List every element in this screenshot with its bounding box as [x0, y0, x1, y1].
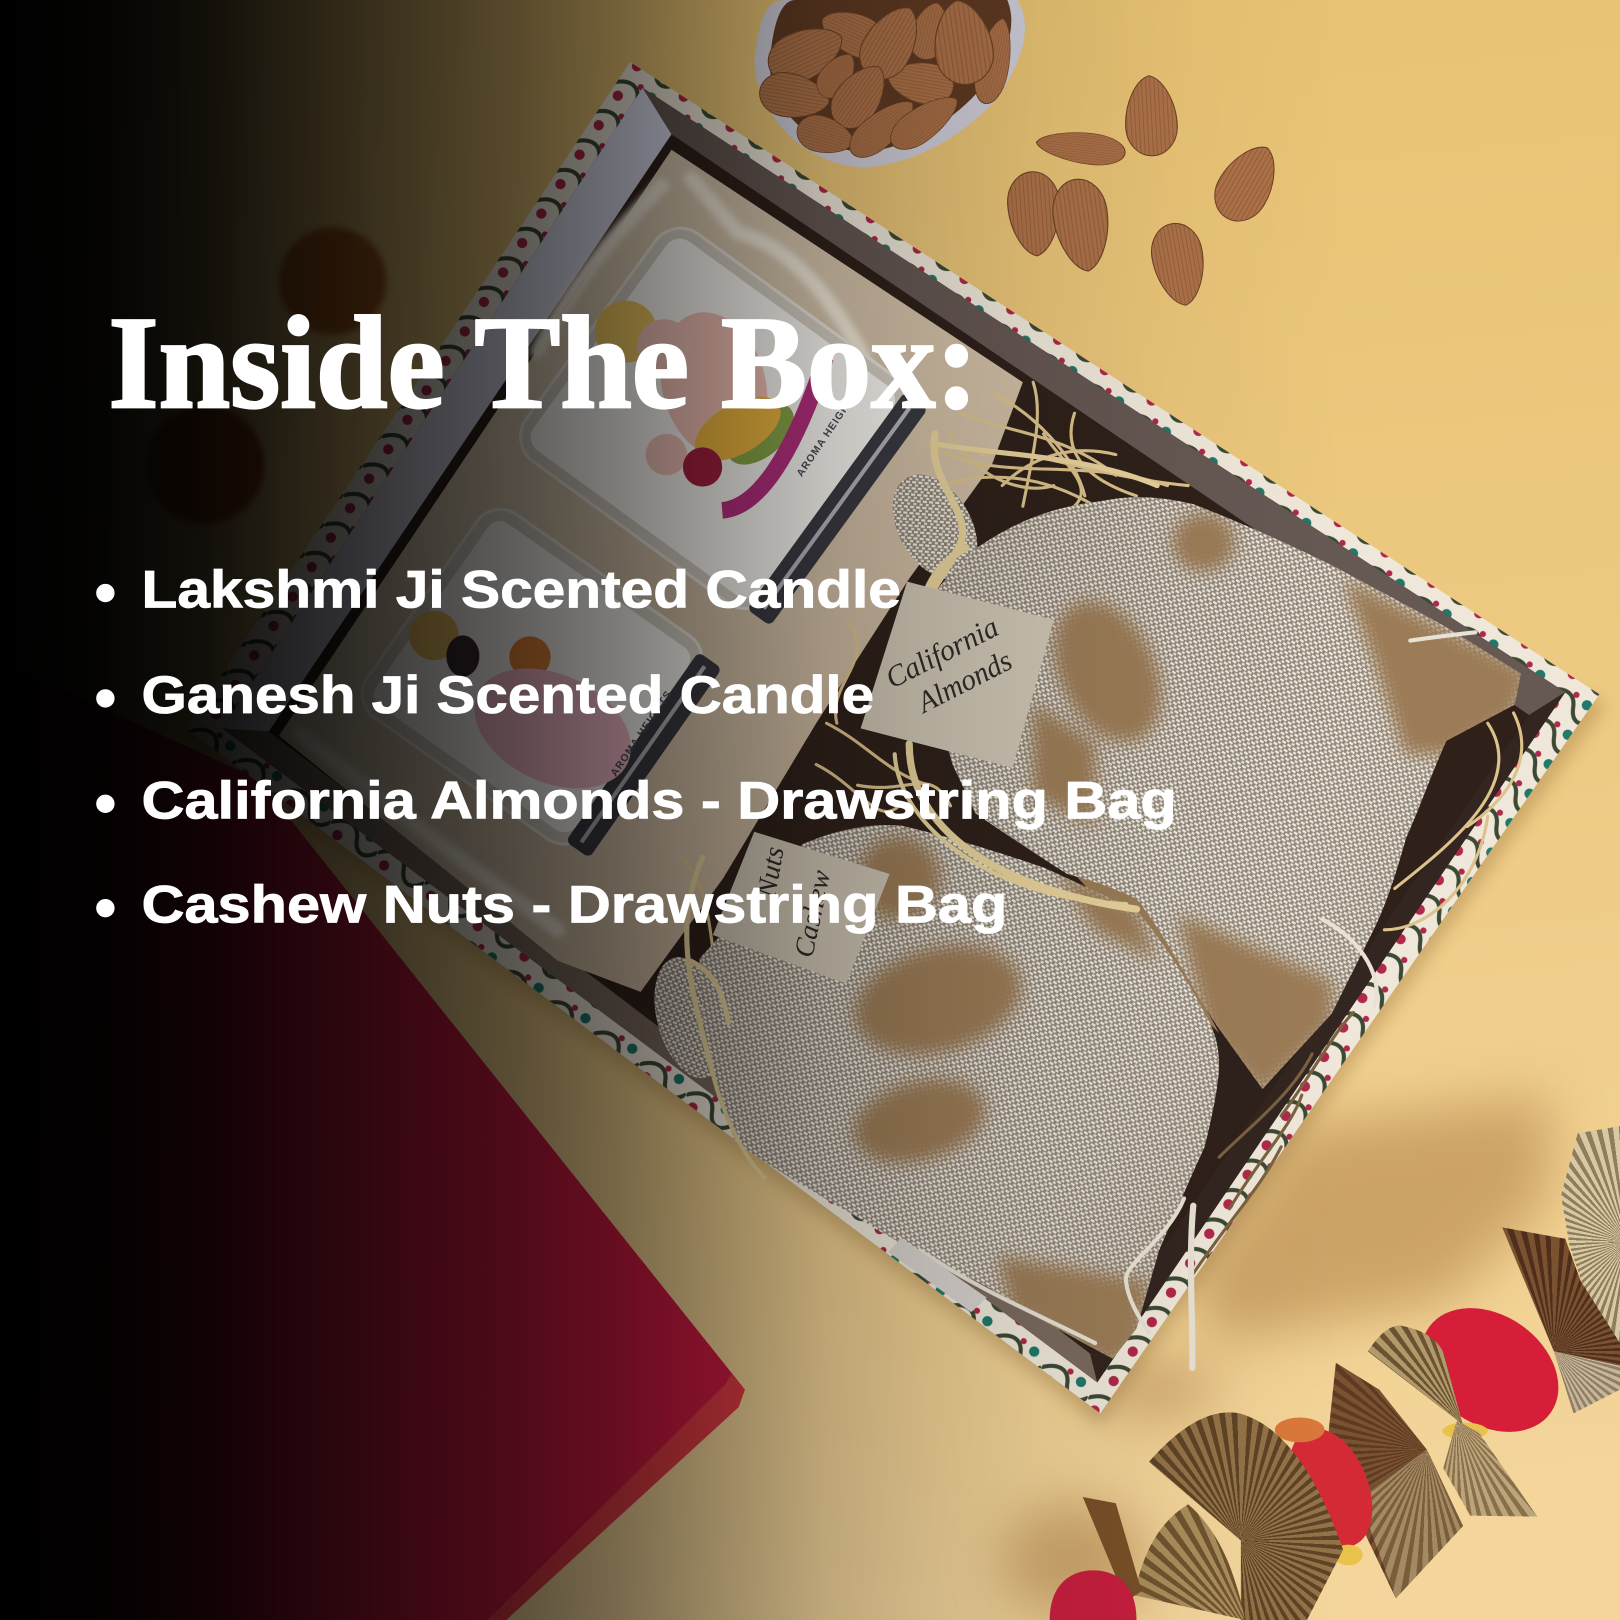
gold wedge fan	[1443, 1420, 1538, 1516]
silk cloth	[279, 150, 1023, 992]
white ribbon strings	[920, 632, 1475, 1368]
silk folds	[300, 179, 864, 930]
red pompom lower	[1050, 1570, 1136, 1620]
list item: Lakshmi Ji candle: Lakshmi Ji Scented Candle	[142, 560, 901, 619]
red pompom middle	[1273, 1416, 1388, 1565]
patterned rim	[186, 62, 1599, 1413]
almonds drawstring bag	[892, 474, 1521, 1089]
pale fan top right	[1561, 1126, 1620, 1343]
soft shadows on surface	[1002, 1095, 1550, 1617]
list item: Cashew Nuts: Cashew Nuts - Drawstring Bag	[142, 876, 1007, 935]
tan lower fan centre	[1370, 1450, 1463, 1598]
candle: Ganesh Ji	[508, 216, 932, 631]
candle: Ganesh Ji: AROMA HEIGHTS	[795, 389, 861, 479]
open gift box	[186, 62, 1608, 1426]
brown fan centre	[1328, 1363, 1463, 1598]
almond bowl	[754, 0, 1025, 167]
box shadow	[186, 124, 1608, 1426]
list item: California Almonds: California Almonds - Drawstring Bag	[142, 771, 1177, 830]
marigold flowers	[145, 227, 386, 525]
list item: Ganesh Ji candle: Ganesh Ji Scented Candle	[142, 666, 874, 725]
inner walls	[222, 88, 1565, 1382]
loose almonds	[1005, 74, 1290, 310]
red gift box	[0, 661, 745, 1620]
tag: California Almonds: Almonds	[910, 644, 1017, 720]
burlap patches	[843, 837, 1157, 1364]
straw	[682, 382, 1522, 1281]
tag: California Almonds	[861, 582, 1054, 768]
bullet list	[97, 560, 1177, 935]
tag: Cashew Nuts: Cashew	[789, 867, 837, 960]
dark fan right	[1502, 1228, 1620, 1366]
candle: Lakshmi Ji: AROMA HEIGHTS	[609, 689, 675, 779]
tag: California Almonds: California	[880, 610, 1004, 695]
burlap patches	[1033, 513, 1529, 1095]
brown strip fan	[1083, 1497, 1142, 1601]
silver fan right	[1554, 1352, 1620, 1414]
bag neck	[642, 949, 738, 1086]
paper fan garland	[1050, 1116, 1620, 1620]
title: Inside The Box:	[108, 289, 978, 436]
tag: Cashew Nuts	[713, 832, 890, 984]
bag neck	[875, 460, 995, 594]
red pompom upper	[1397, 1282, 1582, 1457]
gold fan centre	[1368, 1326, 1463, 1424]
burlap filler between bags	[1064, 863, 1219, 1033]
tag: Cashew Nuts: Nuts	[751, 844, 791, 901]
candle: Lakshmi Ji	[351, 498, 727, 865]
gold fan bottom centre	[1149, 1412, 1343, 1620]
cashew drawstring bag	[654, 825, 1219, 1358]
gold fan bottom left	[1135, 1504, 1245, 1620]
white paper under bag	[889, 1238, 987, 1312]
drawstring knot	[687, 434, 1157, 1178]
